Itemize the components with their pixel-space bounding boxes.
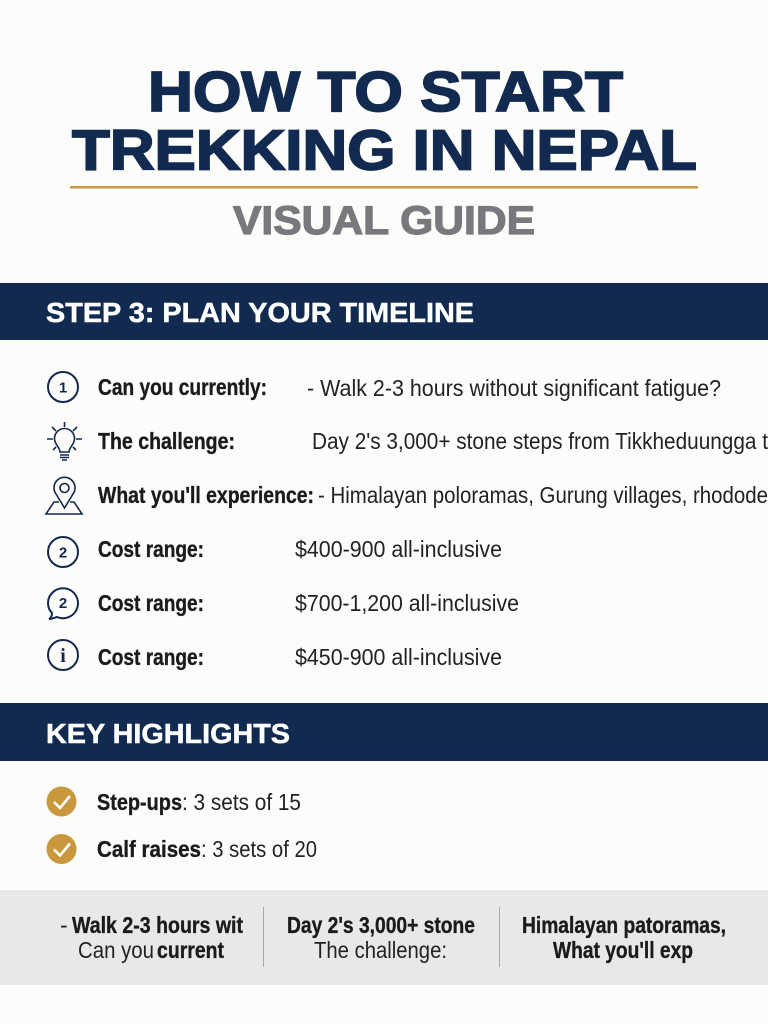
- highlight: calf raises: : 3 sets of 20: [201, 836, 317, 862]
- summary column 1: current: [157, 937, 224, 963]
- row: cost range 450-900: $450-900 all-inclusive: [295, 644, 502, 670]
- row: cost range 400-900: $400-900 all-inclusive: [295, 536, 502, 562]
- row: can you currently: Can you currently:: [98, 374, 267, 400]
- highlight: calf raises: Calf raises: [97, 836, 201, 862]
- icon: number 2: 2: [59, 544, 67, 562]
- highlight: step-ups: [46, 786, 301, 816]
- summary column 3: Himalayan patoramas,: [522, 912, 726, 938]
- summary column 1: Walk 2-3 hours wit: [72, 912, 243, 938]
- row: can you currently: - Walk 2-3 hours without significant fatigue?: [307, 375, 721, 401]
- icon: info: [48, 640, 78, 670]
- section banner: key highlights: KEY HIGHLIGHTS: [46, 718, 290, 749]
- row: cost range 700-1200: [48, 588, 519, 619]
- row: cost range 450-900: Cost range:: [98, 644, 204, 670]
- row: cost range 700-1200: $700-1,200 all-inclusive: [295, 590, 519, 616]
- icon: number 1: 1: [59, 380, 67, 396]
- summary column 1: [60, 912, 243, 963]
- row: what you'll experience: [46, 477, 768, 514]
- icon: gold check: [46, 834, 76, 864]
- summary column 2: [287, 912, 475, 963]
- row: can you currently: [48, 372, 721, 402]
- icon: light bulb: [47, 422, 82, 460]
- highlight: step-ups: Step-ups: [97, 789, 182, 815]
- title underline: [70, 186, 698, 188]
- icon: speech bubble 2: [48, 588, 78, 619]
- highlight: calf raises: [46, 834, 317, 864]
- summary column 1: Can you: [78, 937, 154, 963]
- row: what you'll experience: What you'll experience:: [98, 482, 314, 508]
- section banner: key highlights: [0, 703, 768, 761]
- row: the challenge: The challenge:: [98, 428, 235, 454]
- row: cost range 450-900: [48, 640, 502, 670]
- icon: number 1: [48, 372, 78, 402]
- summary column 2: Day 2's 3,000+ stone: [287, 912, 475, 938]
- section banner: step 3: STEP 3: PLAN YOUR TIMELINE: [46, 297, 474, 328]
- row: cost range 700-1200: Cost range:: [98, 590, 204, 616]
- row: the challenge: [47, 422, 768, 460]
- row: cost range 400-900: Cost range:: [98, 536, 204, 562]
- icon: gold check: [46, 786, 76, 816]
- icon: map pin: [46, 477, 82, 514]
- title: HOW TO START: [148, 60, 623, 124]
- row: cost range 400-900: [48, 536, 502, 567]
- summary column 1: -: [60, 912, 68, 938]
- summary column 3: [522, 912, 726, 963]
- title: [72, 60, 697, 182]
- title: TREKKING IN NEPAL: [72, 118, 697, 182]
- icon: speech bubble 2: 2: [59, 595, 67, 612]
- icon: info: i: [60, 645, 66, 667]
- highlight: step-ups: : 3 sets of 15: [182, 789, 301, 815]
- icon: number 2: [48, 537, 78, 567]
- summary column 2: The challenge:: [314, 937, 447, 963]
- bottom summary band: [0, 890, 768, 985]
- section banner: step 3: [0, 283, 768, 340]
- subtitle: VISUAL GUIDE: [233, 199, 535, 243]
- summary column 3: What you'll exp: [553, 937, 693, 963]
